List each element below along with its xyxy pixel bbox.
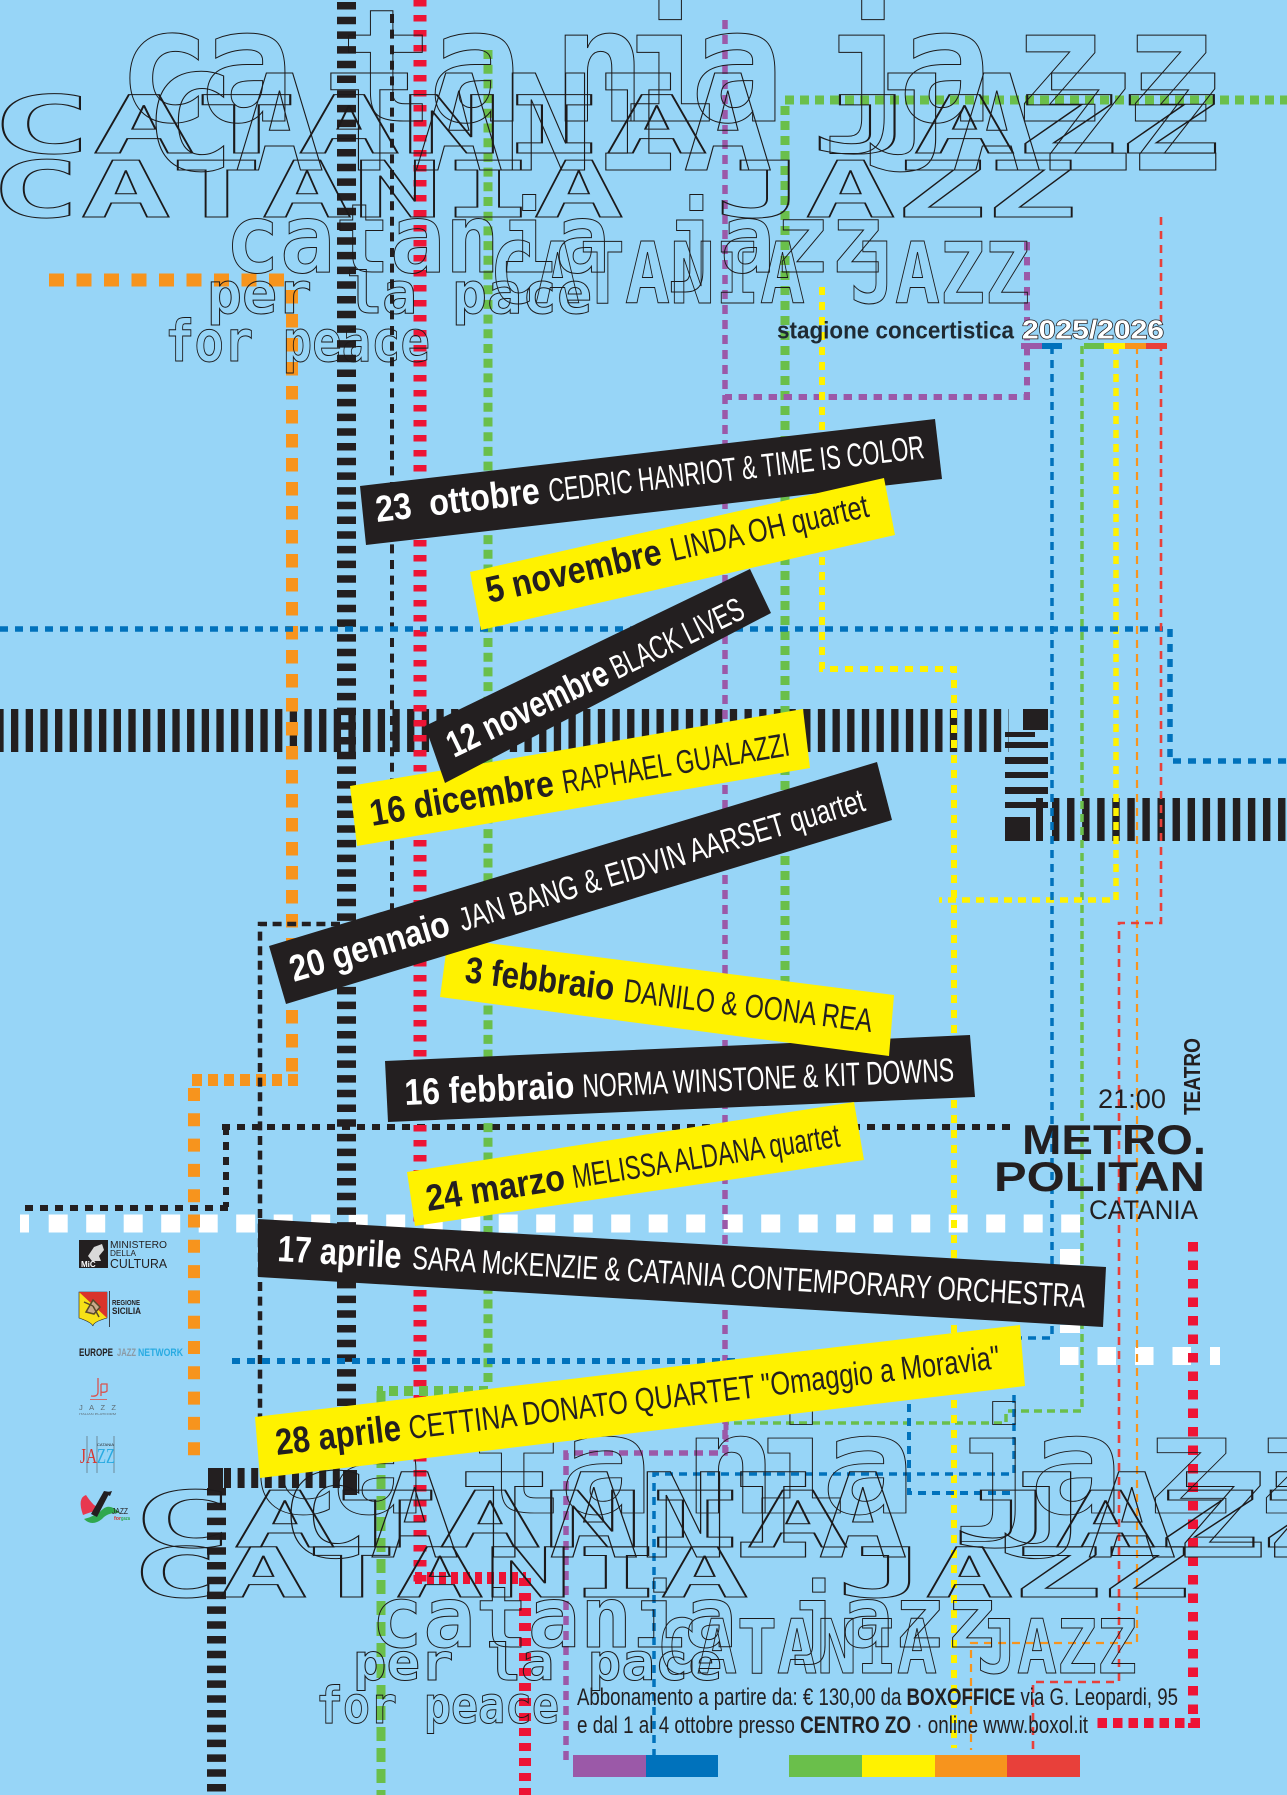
venue block [994, 1038, 1206, 1225]
logo: Europe Jazz Network: JAZZ [117, 1347, 136, 1359]
white dashed band [20, 1224, 1220, 1356]
logo: Europe Jazz Network: EUROPE [79, 1347, 113, 1359]
line: black thin dashed [20, 14, 1015, 1420]
zebra band: short bottom [208, 1468, 357, 1495]
banner: 12 novembre [425, 569, 771, 783]
title: outlined Catania Jazz, bottom stack [131, 1386, 1287, 1736]
banner: 12 novembre: 12 novembre [440, 652, 615, 765]
title: outlined Catania Jazz, bottom stack: CATANIA JAZZ [131, 1476, 1287, 1566]
banner: 3 febbraio: 3 febbraio [463, 949, 617, 1008]
line: red thin [1033, 217, 1161, 1750]
banner: 20 gennaio: 20 gennaio [285, 903, 454, 990]
logo: Catania Jazz: ZZ [97, 1444, 115, 1468]
title: outlined Catania Jazz, bottom stack: CATANIA JAZZ [657, 1603, 1137, 1691]
banner: 16 dicembre [350, 709, 810, 846]
logo: Ministero della Cultura: DELLA [110, 1249, 137, 1258]
line: orange thick [49, 280, 298, 1458]
title: outlined Catania Jazz, bottom stack: for peace [316, 1677, 559, 1736]
title: outlined Catania Jazz, bottom stack: catania jazz [371, 1569, 998, 1668]
title: outlined Catania Jazz, bottom stack: CATANIA JAZZ [131, 1534, 1190, 1614]
banner: 17 aprile [258, 1219, 1106, 1327]
line: green thick [377, 50, 1287, 1795]
banner: 23 ottobre [360, 419, 942, 545]
logo: Jazz for Gaza [81, 1491, 131, 1523]
banner: 28 aprile: CETTINA DONATO QUARTET "Omaggio a Moravia" [406, 1338, 1002, 1446]
title: outlined Catania Jazz, top stack: CATANIA JAZZ [145, 48, 1221, 202]
line: yellow [822, 287, 1116, 1748]
venue block: TEATRO [1179, 1038, 1205, 1115]
logo: Jazz for Gaza: JAZZ [112, 1507, 128, 1516]
line: orange thin [971, 346, 1137, 1750]
title: outlined Catania Jazz, top stack: CATANIA JAZZ [490, 225, 1030, 324]
logo: Italian Jazz Platform: ITALIAN PLATFORM [79, 1412, 117, 1416]
logo: Ministero della Cultura: MiC [81, 1260, 96, 1269]
logo: Jazz for Gaza: gaza [121, 1516, 131, 1522]
banner: 12 novembre: BLACK LIVES [604, 590, 750, 686]
logo: Europe Jazz Network [79, 1347, 183, 1359]
line: black thick vertical [216, 2, 346, 1795]
title: outlined Catania Jazz, bottom stack: per la pace [353, 1634, 722, 1693]
title: outlined Catania Jazz, bottom stack: CATANIA JAZZ [280, 1448, 1287, 1585]
banner: 17 aprile: 17 aprile [277, 1228, 403, 1276]
title: outlined Catania Jazz, top stack: for peace [165, 309, 430, 375]
logo: Italian Jazz Platform [79, 1378, 117, 1416]
subscription info text: e dal 1 al 4 ottobre presso CENTRO ZO · online www.boxol.it [577, 1712, 1088, 1739]
banner: 23 ottobre: 23 ottobre [373, 470, 542, 530]
title: outlined Catania Jazz, top stack: CATANIA JAZZ [0, 146, 1077, 236]
venue block: 21:00 [1098, 1084, 1166, 1114]
season label [777, 314, 1164, 344]
banner: 24 marzo: MELISSA ALDANA quartet [570, 1117, 842, 1195]
banner: 3 febbraio: DANILO & OONA REA [622, 972, 875, 1039]
title: outlined Catania Jazz, top stack: per la pace [207, 261, 592, 327]
venue block: METRO. [1022, 1116, 1206, 1163]
banner: 16 dicembre: RAPHAEL GUALAZZI [559, 726, 792, 800]
logo: Regione Sicilia: REGIONE [112, 1300, 140, 1307]
subscription info text [577, 1684, 1178, 1739]
title: outlined Catania Jazz, top stack: CATANIA JAZZ [0, 79, 1221, 172]
title: outlined Catania Jazz, top stack [0, 0, 1221, 375]
logo: Europe Jazz Network: NETWORK [138, 1347, 183, 1359]
banner: 16 febbraio [385, 1035, 975, 1122]
logo: Regione Sicilia [79, 1291, 141, 1327]
venue block: CATANIA [1089, 1195, 1198, 1225]
logo: Ministero della Cultura: MINISTERO [110, 1239, 167, 1251]
season label: 2025/2026 [1022, 314, 1164, 344]
logo: Ministero della Cultura: CULTURA [110, 1257, 168, 1271]
banner: 3 febbraio [440, 938, 894, 1056]
colour key: bottom [573, 1755, 1080, 1777]
banner: 24 marzo: 24 marzo [423, 1157, 568, 1219]
banner: 24 marzo [407, 1102, 864, 1226]
line: purple [566, 20, 1027, 1760]
logo: Catania Jazz: JA [80, 1444, 98, 1468]
line: red thick [415, 0, 1200, 1795]
zebra band: lower right [1052, 798, 1287, 841]
logo: Catania Jazz [80, 1436, 115, 1473]
venue block: POLITAN [994, 1153, 1205, 1200]
banner: 16 dicembre: 16 dicembre [366, 762, 557, 834]
zebra band: upper horizontal [0, 709, 1048, 841]
banner: 28 aprile: 28 aprile [273, 1407, 403, 1463]
banner: 16 febbraio: NORMA WINSTONE & KIT DOWNS [582, 1051, 955, 1104]
logo: Italian Jazz Platform: JAZZ [79, 1403, 116, 1412]
logo: Regione Sicilia: SICILIA [112, 1306, 141, 1316]
colour key: top [1021, 343, 1167, 349]
banner: 5 novembre: LINDA OH quartet [667, 487, 872, 568]
banner: 5 novembre [470, 478, 895, 630]
logo: Jazz for Gaza: for [114, 1516, 122, 1522]
logo: Ministero della Cultura [79, 1239, 168, 1271]
season label: stagione concertistica [777, 318, 1015, 344]
banner: 20 gennaio [269, 762, 892, 1004]
line: blue [0, 346, 1287, 1755]
banner: 20 gennaio: JAN BANG & EIDVIN AARSET quartet [454, 781, 869, 938]
banner: 5 novembre: 5 novembre [482, 531, 665, 611]
banner: 16 febbraio: 16 febbraio [404, 1065, 575, 1113]
logo: Catania Jazz: CATANIA [97, 1442, 114, 1447]
subscription info text: Abbonamento a partire da: € 130,00 da BOXOFFICE via G. Leopardi, 95 [577, 1684, 1178, 1711]
banner: 28 aprile [255, 1325, 1025, 1478]
title: outlined Catania Jazz, top stack: catania jazz [225, 185, 885, 295]
banner: 23 ottobre: CEDRIC HANRIOT & TIME IS COLOR [546, 428, 926, 509]
